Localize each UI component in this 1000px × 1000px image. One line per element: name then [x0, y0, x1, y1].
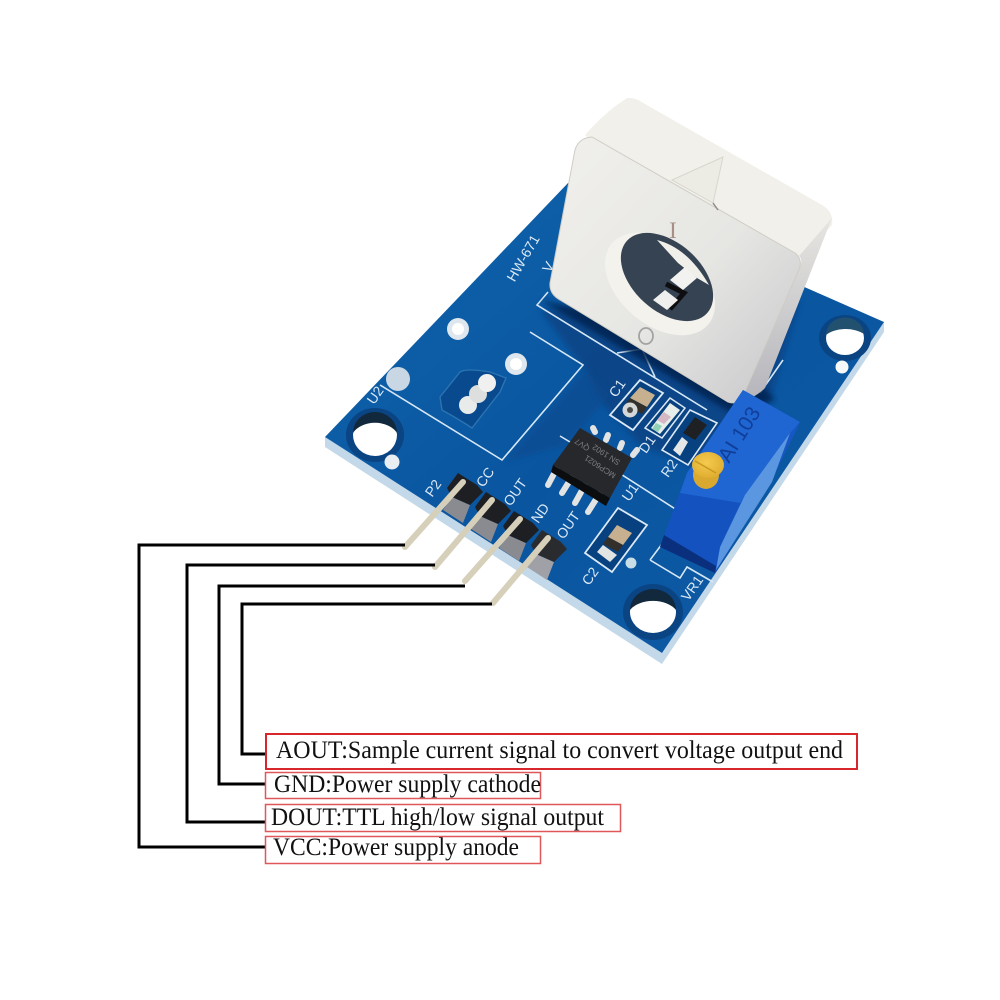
pin header [443, 473, 567, 580]
callout: AOUT: AOUT:Sample current signal to convert voltage output end [276, 737, 843, 764]
shadow under block [540, 300, 775, 412]
header segment 3 [499, 511, 539, 561]
silkscreen label: C2: C2 [578, 564, 602, 588]
silkscreen label: P2: P2 [422, 476, 445, 500]
mounting holes and pads [346, 315, 871, 640]
letter I: I [669, 218, 677, 243]
leader: GND [219, 586, 465, 784]
adjustment screw [692, 452, 724, 489]
letter O [639, 328, 653, 344]
callout: VCC: VCC:Power supply anode [273, 834, 519, 861]
header segment 1 [443, 473, 483, 523]
circuit board [325, 183, 884, 664]
silkscreen label: OUT bottom: OUT [553, 508, 583, 542]
header segment 4 [527, 530, 567, 580]
resistor R2 [662, 410, 717, 465]
block right side [737, 218, 832, 404]
callout: DOUT: DOUT:TTL high/low signal output [271, 804, 604, 831]
sensor module photo illustration [325, 98, 884, 664]
silkscreen label: U1: U1 [618, 480, 642, 504]
LED [645, 398, 685, 438]
silkscreen label: VR1: VR1 [678, 572, 706, 604]
chip marking: QV7: QV7 [573, 436, 591, 453]
callout: GND: GND:Power supply cathode [274, 771, 541, 798]
leader: AOUT [242, 604, 492, 754]
silkscreen label: C1: C1 [605, 376, 629, 400]
capacitor C1 [610, 380, 663, 430]
silkscreen label: HW-671: HW-671 [503, 232, 543, 284]
block top face [585, 98, 832, 258]
trimmer potentiometer [660, 390, 800, 573]
leader: DOUT [187, 565, 435, 822]
op-amp chip with legs [548, 428, 637, 512]
white current transformer block [540, 98, 832, 412]
silkscreen label: R2: R2 [657, 456, 681, 480]
silkscreen label: OUT top: OUT [500, 475, 530, 509]
chip marking: SN 1902: SN 1902 [590, 442, 622, 467]
leader lines [139, 545, 492, 847]
pot marking: AI 103 [714, 403, 765, 467]
silkscreen label: U2: U2 [363, 383, 387, 407]
silkscreen label: D1: D1 [635, 432, 659, 456]
VR1 outline [650, 540, 713, 582]
header pins [405, 482, 548, 603]
header segment 2 [471, 492, 511, 542]
triangle mark [672, 157, 723, 210]
chip marking: MCP6021: MCP6021 [582, 453, 618, 480]
silkscreen label: CC: CC [473, 464, 497, 490]
aperture with conductors [585, 212, 735, 356]
capacitor C2 [585, 508, 647, 572]
silkscreen label: partially hidden mark: V [539, 258, 558, 275]
leader: VCC [139, 545, 405, 847]
silkscreen label: ND: ND [528, 500, 552, 526]
block front face [550, 137, 800, 403]
silkscreen outlines [380, 292, 783, 512]
